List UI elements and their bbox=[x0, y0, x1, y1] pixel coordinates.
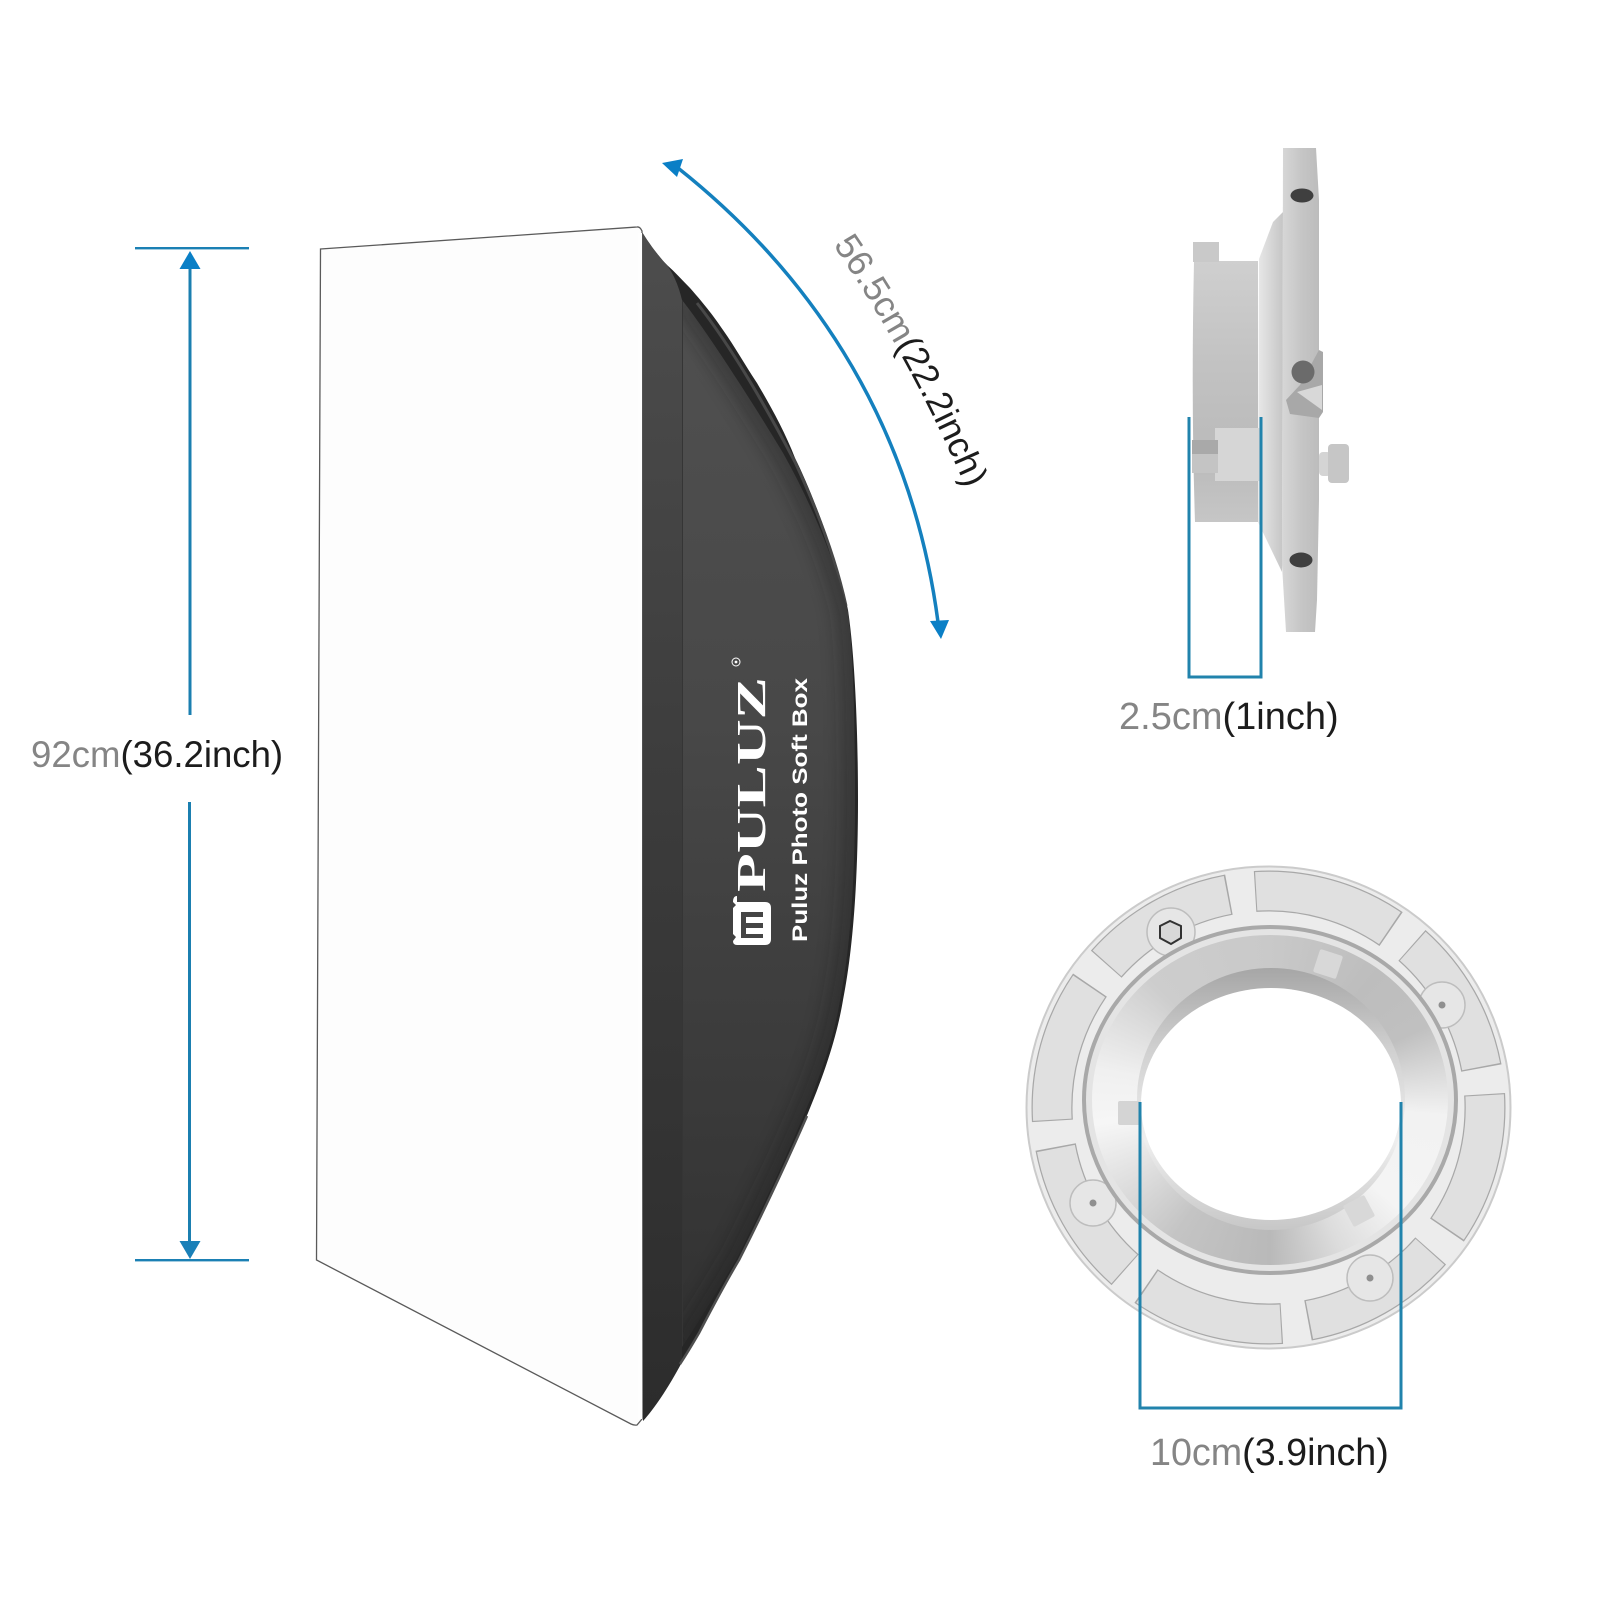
height label: 92cm(36.2inch) bbox=[31, 734, 283, 775]
speed ring side key bbox=[1192, 428, 1260, 481]
registered mark bbox=[732, 658, 740, 666]
hub opening bbox=[1141, 988, 1401, 1220]
speed ring cylinder bbox=[1193, 261, 1258, 522]
hub groove bbox=[1084, 927, 1456, 1273]
height dimension arrow bbox=[135, 247, 249, 1261]
side bracket bbox=[1189, 417, 1261, 677]
speed ring top tab bbox=[1193, 242, 1219, 262]
flange thumb screw bbox=[1319, 444, 1349, 483]
softbox dark side shell bbox=[642, 232, 858, 1421]
screw boss lower right bbox=[1347, 1255, 1393, 1301]
side label: 2.5cm(1inch) bbox=[1119, 696, 1339, 738]
brand logo icon bbox=[733, 896, 771, 945]
ring panels bbox=[1040, 879, 1497, 1336]
front bracket bbox=[1140, 1102, 1401, 1408]
speed ring cone bbox=[1258, 212, 1283, 572]
flange holes bbox=[1290, 188, 1314, 568]
softbox lower rim highlight bbox=[680, 1116, 807, 1364]
softbox bbox=[316, 227, 862, 1425]
front view of speed ring bbox=[1026, 866, 1510, 1348]
speed ring flange plate bbox=[1282, 148, 1319, 632]
hub inner wall bbox=[1137, 968, 1405, 1230]
brand name PULUZ: PULUZ bbox=[728, 677, 774, 892]
side view of speed ring bbox=[1192, 148, 1349, 632]
ring flange base bbox=[1026, 866, 1510, 1348]
hub tab top bbox=[1313, 949, 1343, 979]
product name: Puluz Photo Soft Box bbox=[789, 678, 812, 942]
softbox side panel bbox=[681, 280, 862, 1360]
depth label: 56.5cm(22.2inch) bbox=[836, 233, 987, 486]
hex bolt boss bbox=[1147, 908, 1195, 956]
softbox upper rim highlight bbox=[697, 303, 846, 606]
front label: 10cm(3.9inch) bbox=[1150, 1431, 1389, 1473]
screw boss upper right bbox=[1419, 982, 1465, 1028]
hub tab left bbox=[1118, 1101, 1140, 1125]
diffuser right edge cover bbox=[638, 233, 642, 1419]
screw boss lower left bbox=[1070, 1180, 1116, 1226]
ring panel outlines bbox=[1039, 878, 1498, 1337]
flange clip and ball bbox=[1286, 350, 1323, 418]
hub tab lower right bbox=[1343, 1195, 1375, 1227]
softbox side strip bbox=[642, 232, 682, 1421]
depth curved arrow bbox=[662, 159, 949, 639]
softbox front diffuser bbox=[316, 227, 642, 1425]
hub conic metal surface bbox=[1092, 935, 1448, 1265]
